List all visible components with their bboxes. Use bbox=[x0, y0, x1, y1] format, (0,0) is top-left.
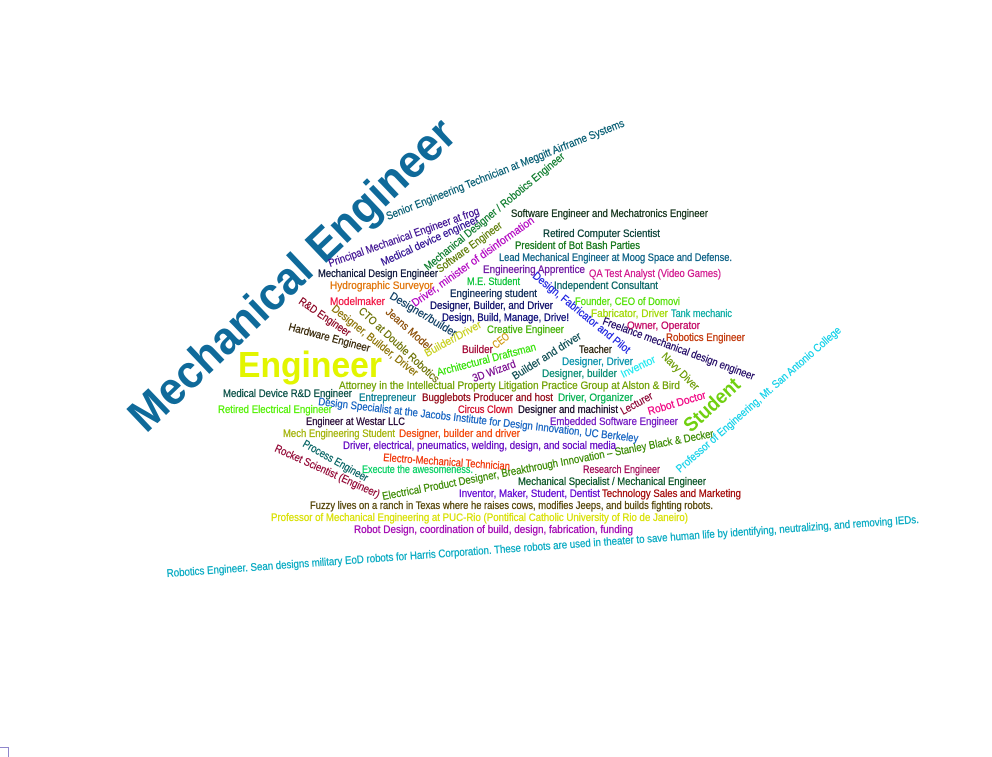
angled: Rocket Scientist: Rocket Scientist (Engineer) bbox=[274, 444, 380, 500]
angled: Software Engineer: Software Engineer bbox=[436, 222, 502, 272]
label: Designer, Builder, and Driver: Designer, Builder, and Driver bbox=[430, 300, 553, 312]
label: Robotics Engineer: Robotics Engineer bbox=[666, 332, 745, 344]
angled: Mechanical Designer / Robotics Engineer: Mechanical Designer / Robotics Engineer bbox=[424, 153, 564, 271]
label: Professor of Mechanical Engineering: Professor of Mechanical Engineering at PUC-Rio (Pontifical Catholic University of Rio de Janeiro) bbox=[271, 512, 688, 524]
label: Lead Mechanical Engineer: Lead Mechanical Engineer at Moog Space and Defense. bbox=[499, 252, 732, 264]
label: Designer, builder and driver: Designer, builder and driver bbox=[399, 428, 520, 440]
angled: Lecturer: Lecturer bbox=[620, 393, 652, 415]
label: Designer, builder: Designer, builder bbox=[542, 368, 617, 380]
label: Owner, Operator: Owner, Operator bbox=[627, 320, 700, 332]
label: Medical Device R&D Engineer: Medical Device R&D Engineer bbox=[223, 388, 352, 400]
large word: Engineer: Engineer bbox=[238, 344, 382, 385]
label: Founder, CEO of Domovi: Founder, CEO of Domovi bbox=[575, 296, 680, 308]
angled: Builder/Driver: Builder/Driver bbox=[424, 322, 481, 357]
angled: Jeans Model: Jeans Model bbox=[386, 308, 433, 350]
angled: Designer, Builder, Driver: Designer, Builder, Driver bbox=[332, 304, 418, 376]
label: Execute the awesomeness: Execute the awesomeness. bbox=[362, 464, 473, 476]
angled: Design Specialist: Design Specialist at the Jacobs Institute for Design Innovation, UC Berkeley bbox=[318, 398, 639, 444]
label: Hydrographic Surveyor: Hydrographic Surveyor bbox=[330, 280, 433, 292]
label: Fuzzy lives on a ranch: Fuzzy lives on a ranch in Texas where he raises cows, modifies Jeeps, and builds fighting robots. bbox=[310, 500, 713, 512]
angled: Robotics Engineer, Sean: Robotics Engineer. Sean designs military EoD robots for Harris Corporation. These robots are used in theater to save human life by identifying, neutralizing, and removing IEDs. bbox=[167, 516, 918, 578]
label: Driver, Organizer: Driver, Organizer bbox=[558, 392, 633, 404]
label: Engineering Apprentice: Engineering Apprentice bbox=[483, 264, 585, 276]
angled: Electro-Mechanical Technician: Electro-Mechanical Technician bbox=[384, 453, 510, 470]
label: Design, Build, Manage, Drive!: Design, Build, Manage, Drive! bbox=[442, 312, 569, 324]
angled: Professor of Engineering, Mt. San Antonio College: Professor of Engineering, Mt. San Antonio College bbox=[676, 328, 841, 473]
angled: Inventor: Inventor bbox=[620, 356, 655, 378]
angled: Builder and driver: Builder and driver bbox=[512, 333, 581, 380]
label: Attorney: Attorney in the Intellectual Property Litigation Practice Group at Alston & Bird bbox=[339, 380, 680, 392]
label: Circus Clown: Circus Clown bbox=[458, 404, 513, 416]
large word: Student: Student bbox=[684, 378, 742, 431]
label: Tank mechanic: Tank mechanic bbox=[671, 308, 732, 320]
label: Fabricator, Driver: Fabricator, Driver bbox=[591, 308, 668, 320]
label: Creative Engineer: Creative Engineer bbox=[487, 324, 564, 336]
label: Entrepreneur: Entrepreneur bbox=[359, 392, 416, 404]
label: Embedded Software Engineer: Embedded Software Engineer bbox=[550, 416, 678, 428]
angled: CTO at Double Robotics: CTO at Double Robotics bbox=[360, 308, 438, 382]
angled: 3D Wizard: 3D Wizard bbox=[472, 359, 516, 382]
heading word: Mechanical Engineer: Mechanical Engineer bbox=[126, 120, 453, 432]
corner mark bbox=[0, 748, 8, 757]
angled: Architectural Draftsman: Architectural Draftsman bbox=[438, 344, 536, 376]
label: Software Engineer and Mechatronics Engineer: Software Engineer and Mechatronics Engineer bbox=[511, 208, 708, 220]
angled: Senior Engineering Technician: Senior Engineering Technician at Meggitt Airframe Systems bbox=[386, 121, 624, 220]
label: Teacher: Teacher bbox=[579, 344, 612, 356]
label: Retired Computer Scientist: Retired Computer Scientist bbox=[543, 228, 660, 240]
angled: Principal Mechanical Engineer: Principal Mechanical Engineer at frog bbox=[328, 208, 480, 267]
angled: Navy Diver: Navy Diver bbox=[662, 352, 700, 390]
label: Independent Consultant: Independent Consultant bbox=[554, 280, 658, 292]
angled: Medical device engineer: Medical device engineer bbox=[380, 216, 478, 266]
label: Mech Engineering Student: Mech Engineering Student bbox=[283, 428, 395, 440]
angled: Driver, minister of disinformation: Driver, minister of disinformation bbox=[411, 218, 534, 307]
label: Builder: Builder bbox=[462, 344, 493, 356]
angled: Freelance mechanical design engineer: Freelance mechanical design engineer bbox=[602, 317, 755, 380]
label: M.E. Student: M.E. Student bbox=[467, 276, 520, 288]
label: Mechanical Design Engineer: Mechanical Design Engineer bbox=[318, 268, 438, 280]
label: Bugglebots Producer and host: Bugglebots Producer and host bbox=[422, 392, 553, 404]
label: Research Engineer: Research Engineer bbox=[583, 464, 660, 476]
angled: R&D Engineer: R&D Engineer bbox=[298, 297, 351, 336]
angled: Designer/builder: Designer/builder bbox=[390, 292, 457, 336]
angled: Hardware Engineer: Hardware Engineer bbox=[288, 322, 370, 352]
label: Inventor, Maker, Student, Dentist: Inventor, Maker, Student, Dentist bbox=[459, 488, 600, 500]
label: President of Bot Bash Parties: President of Bot Bash Parties bbox=[515, 240, 640, 252]
angled: Electrical Product Designer: Electrical Product Designer, Breakthrough Innovation – Stanley Black & Decker bbox=[382, 431, 714, 500]
label: Mechanical Specialist: Mechanical Specialist / Mechanical Engineer bbox=[518, 476, 706, 488]
label: Technology Sales and Marketing: Technology Sales and Marketing bbox=[602, 488, 741, 500]
label: Driver, electrical: Driver, electrical, pneumatics, welding, design, and social media bbox=[343, 440, 617, 452]
label: Engineering student: Engineering student bbox=[450, 288, 537, 300]
label: Retired Electrical Engineer: Retired Electrical Engineer bbox=[218, 404, 332, 416]
angled: CEO: CEO bbox=[492, 333, 509, 348]
label: QA Test Analyst: QA Test Analyst (Video Games) bbox=[589, 268, 721, 280]
label: Modelmaker: Modelmaker bbox=[330, 296, 385, 308]
label: Designer, Driver: Designer, Driver bbox=[562, 356, 633, 368]
angled: Process Engineer: Process Engineer bbox=[302, 440, 368, 482]
label: Engineer at Westar LLC: Engineer at Westar LLC bbox=[306, 416, 405, 428]
angled: Robot Doctor: Robot Doctor bbox=[648, 392, 706, 415]
label: Designer and machinist: Designer and machinist bbox=[518, 404, 618, 416]
angled: Design, Fabricator and Pilot: Design, Fabricator and Pilot bbox=[532, 272, 630, 354]
label: Robot Design: Robot Design, coordination of build, design, fabrication, funding bbox=[354, 524, 633, 536]
